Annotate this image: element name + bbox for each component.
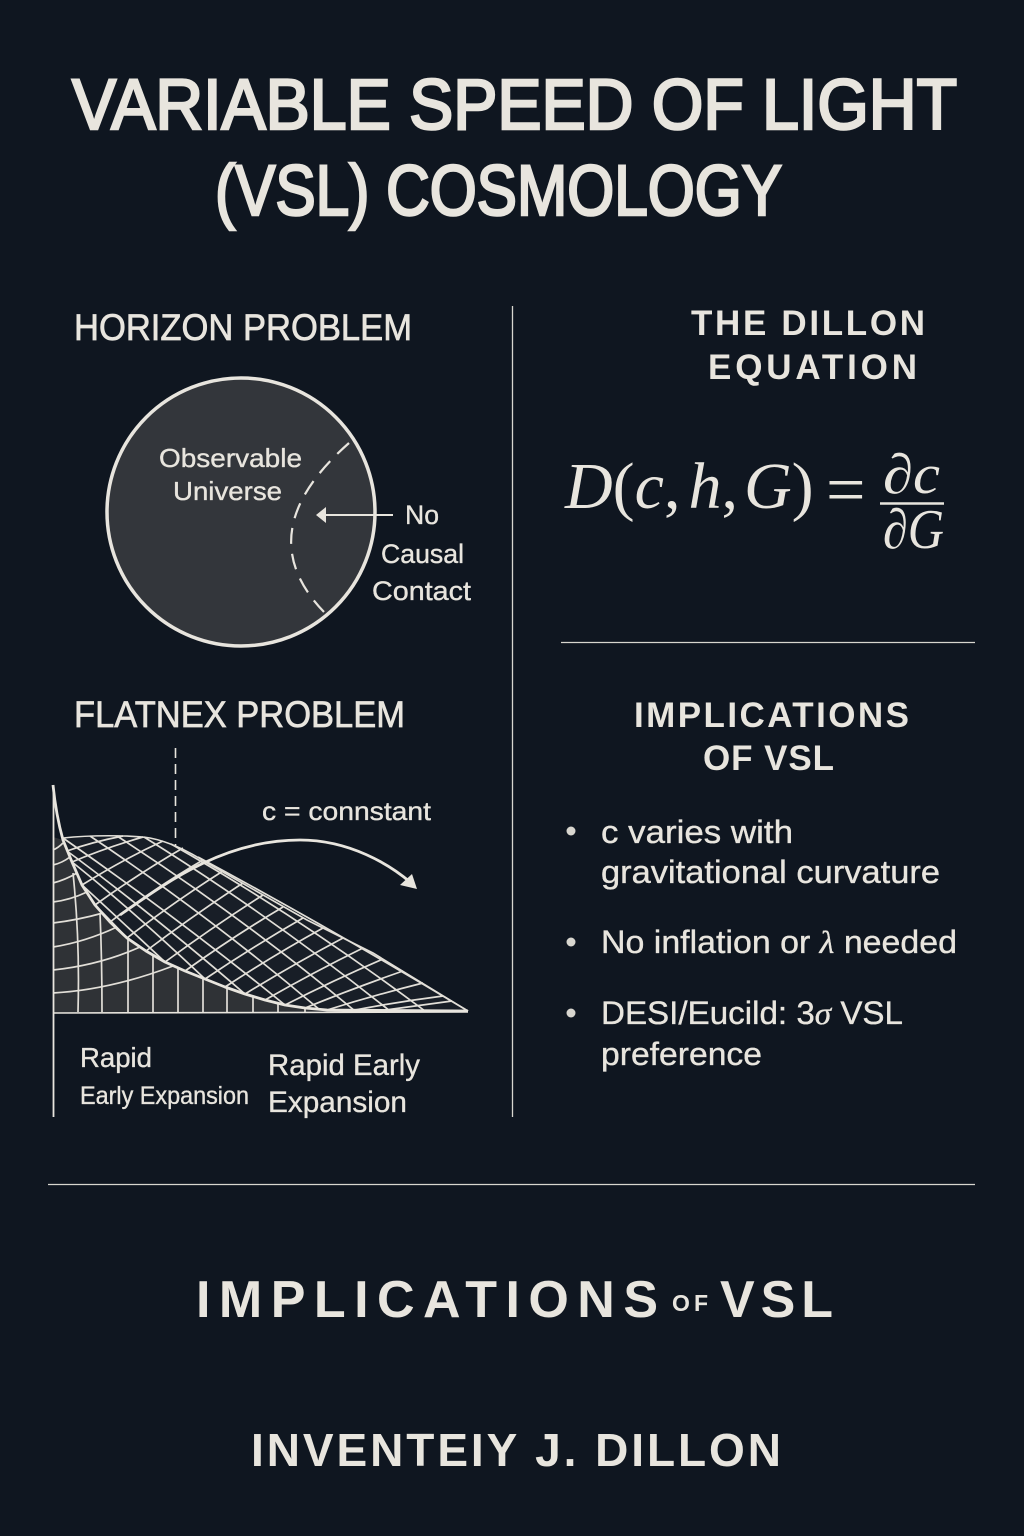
diagram: observable universe circle: Universe [173,476,282,506]
title: VARIABLE SPEED OF LIGHT [72,66,957,145]
diagram: observable universe circle [107,378,375,646]
label: no causal contact [372,500,472,606]
equation: = [826,452,865,529]
label: rapid early expansion left: Early Expansion [80,1082,249,1110]
heading: implications of vsl: OF VSL [703,739,834,778]
heading: implications of vsl: IMPLICATIONS [634,696,909,735]
equation [564,444,944,561]
bullet: c varies: gravitational curvature [601,854,940,890]
heading: flatness problem: FLATNEX PROBLEM [74,694,405,735]
label: rapid early expansion right [268,1049,420,1119]
label: no causal contact: No [405,500,439,530]
arrow: constant c curve [120,840,417,915]
chart: expansion mesh [53,748,468,1117]
footer heading: implications of vsl: VSL [720,1271,833,1329]
footer heading: implications of vsl: IMPLICATIONS [196,1271,658,1329]
heading: implications of vsl [634,696,909,778]
panel: flatness problem [53,694,468,1119]
heading: horizon problem: HORIZON PROBLEM [74,307,412,348]
label: c = constant: c = connstant [262,796,432,826]
bullet: c varies: c varies with [601,814,793,850]
footer heading: implications of vsl: OF [672,1290,708,1316]
label: rapid early expansion right: Expansion [268,1086,407,1119]
footer: author credit: INVENTEIY J. DILLON [251,1424,781,1476]
bullet: desi euclid [566,995,903,1072]
bullet: no inflation: No inflation or λ needed [601,924,957,960]
label: rapid early expansion right: Rapid Early [268,1049,420,1082]
title: (VSL) COSMOLOGY [215,152,782,231]
bullet: c varies [566,814,940,890]
title [72,66,957,231]
heading: the dillon equation [691,304,925,387]
panel: implications of vsl [566,696,957,1072]
equation: ∂G [883,499,944,561]
diagram: observable universe circle: Observable [159,443,302,473]
equation: D(c,h,G) [564,450,814,523]
bullet: desi euclid: DESI/Eucild: 3σ VSL [601,995,903,1031]
panel: horizon problem [74,307,472,646]
label: no causal contact: Contact [372,576,472,606]
panel: the dillon equation [564,304,944,561]
heading: the dillon equation: EQUATION [708,348,917,387]
label: rapid early expansion left: Rapid [80,1042,152,1073]
label: no causal contact: Causal [381,539,464,569]
equation: ∂c [883,444,940,506]
arrow: no causal contact pointer [316,507,393,523]
bullet: desi euclid: preference [601,1036,762,1072]
label: rapid early expansion left [80,1042,249,1110]
heading: the dillon equation: THE DILLON [691,304,925,343]
